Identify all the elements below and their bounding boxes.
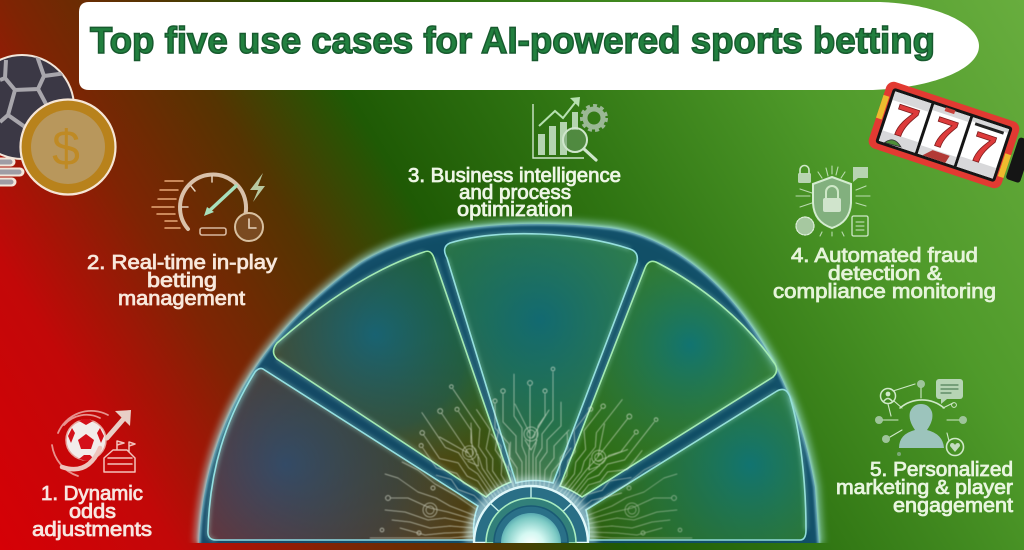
panel edge glow	[208, 234, 806, 540]
panel 5: lower right segment	[586, 389, 806, 540]
banner shape	[79, 2, 979, 90]
label: 1. Dynamic	[41, 483, 143, 505]
title banner	[79, 2, 979, 90]
soccer ball	[0, 55, 74, 159]
label	[773, 245, 996, 303]
icon: slot machine 777	[867, 80, 1024, 196]
speed bars	[0, 162, 20, 182]
icon: slot machine 777: 7	[886, 95, 924, 150]
panel 3: top segment	[445, 234, 637, 483]
label: odds	[69, 501, 116, 523]
icon: bar chart with magnifier and gear	[533, 97, 606, 160]
item 4: automated fraud detection and compliance monitoring	[773, 166, 996, 303]
icon: slot machine 777: 7	[926, 108, 963, 160]
item 1: dynamic odds adjustments	[32, 410, 152, 541]
icon: soccer ball, arrow and stadium	[52, 410, 135, 476]
label	[836, 459, 1013, 517]
wheel outer glow	[199, 224, 819, 544]
item 5: personalized marketing and player engagement	[836, 379, 1013, 517]
panel 1: lower left segment	[208, 368, 478, 540]
dollar coin: $	[52, 120, 80, 176]
central hub	[465, 477, 597, 543]
item 2: real-time in-play betting management	[87, 173, 277, 310]
item 3: business intelligence and process optimization	[408, 97, 621, 221]
icon: speedometer and clock	[152, 173, 265, 241]
panel 2: upper left segment	[274, 251, 511, 497]
label: and process	[459, 182, 571, 204]
label	[32, 483, 152, 541]
label: 3. Business intelligence	[408, 165, 621, 187]
label: adjustments	[32, 519, 152, 541]
label: management	[118, 288, 245, 310]
label	[87, 252, 277, 310]
icon: shield with lock and circuits	[796, 166, 870, 236]
label: optimization	[457, 199, 573, 221]
label: 5. Personalized	[870, 459, 1013, 481]
circuit traces	[370, 367, 692, 538]
glowing AI wheel	[199, 224, 819, 544]
dollar coin	[20, 100, 116, 194]
label: 2. Real-time in-play	[87, 252, 277, 274]
wheel rim and spokes	[199, 224, 819, 544]
label: betting	[147, 270, 217, 292]
label: marketing & player	[836, 477, 1013, 499]
label	[408, 165, 621, 221]
icon: slot machine 777: 7	[964, 122, 1001, 174]
icon: person network	[875, 379, 967, 456]
label: engagement	[893, 495, 1013, 517]
label: 4. Automated fraud	[791, 245, 978, 267]
panel 4: upper right segment	[560, 261, 777, 497]
label: detection &	[828, 263, 943, 285]
rim highlight	[199, 224, 819, 544]
title text: Top five use cases for AI-powered sports betting	[90, 20, 935, 61]
label: compliance monitoring	[773, 281, 996, 303]
icon: soccer ball and dollar coin	[0, 55, 116, 194]
